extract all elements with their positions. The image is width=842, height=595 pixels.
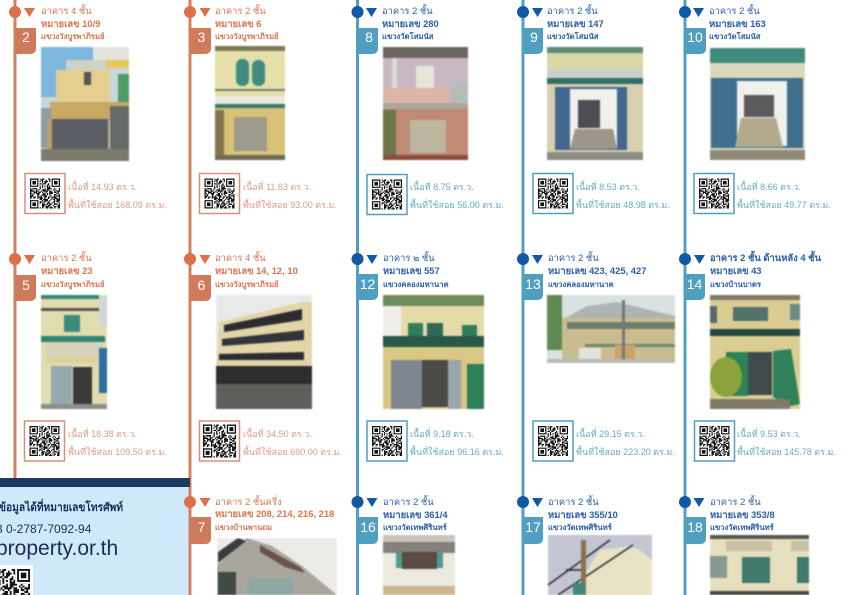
area details (68, 180, 167, 210)
heading: แขวงวัดโสมนัส (547, 31, 599, 41)
number tab (190, 517, 211, 544)
area details (243, 180, 337, 210)
number tab (15, 28, 36, 54)
heading (383, 251, 449, 289)
number tab: 14 (687, 276, 702, 292)
heading: แขวงวัดเทพศิรินทร์ (548, 523, 613, 532)
heading: แขวงบ้านพานถม (215, 523, 272, 532)
marker (352, 6, 377, 18)
heading (383, 495, 448, 532)
area details: เนื้อที่ 8.75 ตร.ว. (410, 180, 474, 192)
heading (548, 251, 646, 289)
marker (517, 496, 543, 508)
card 12 (352, 251, 504, 461)
photo (383, 47, 468, 160)
area details (410, 427, 504, 457)
heading (41, 4, 105, 42)
heading (215, 4, 279, 42)
area details: เนื้อที่ 34.50 ตร.ว. (243, 427, 312, 439)
area details: พื้นที่ใช้สอย 109.50 ตร.ม. (68, 445, 167, 457)
marker (517, 253, 543, 265)
area details: พื้นที่ใช้สอย 223.20 ตร.ม. (576, 445, 675, 457)
heading: แขวงวัดเทพศิรินทร์ (710, 523, 775, 532)
area details: พื้นที่ใช้สอย 48.98 ตร.ม. (576, 198, 670, 210)
timeline: blue column 4 (522, 0, 524, 595)
heading: อาคาร 2 ชั้นครึ่ง (215, 495, 282, 507)
heading: หมายเลข 353/8 (710, 509, 775, 520)
photo (710, 295, 800, 409)
QR code (367, 174, 407, 214)
card 3 (184, 4, 337, 214)
heading: หมายเลข 10/9 (41, 18, 100, 29)
card 8 (352, 4, 504, 214)
heading: อาคาร 2 ชั้น (548, 495, 599, 507)
panel header band (0, 478, 190, 487)
number tab (357, 274, 378, 300)
marker (9, 253, 35, 265)
number tab (523, 274, 543, 300)
heading: หมายเลข 6 (215, 18, 261, 29)
heading (41, 251, 105, 290)
heading: อาคาร 2 ชั้น (547, 4, 598, 16)
heading (382, 4, 439, 41)
heading: แขวงวังบูรพาภิรมย์ (41, 32, 105, 42)
heading: แขวงคลองมหานาค (548, 280, 614, 289)
marker (352, 253, 378, 265)
marker (9, 6, 35, 18)
number tab: 12 (360, 276, 375, 292)
photo (548, 535, 652, 595)
area details (576, 427, 675, 457)
heading (215, 495, 334, 532)
heading: หมายเลข 23 (41, 265, 93, 276)
photo (216, 295, 312, 409)
number tab: 2 (22, 29, 30, 45)
heading: แขวงวังบูรพาภิรมย์ (215, 280, 279, 290)
heading: อาคาร 2 ชั้น ด้านหลัง 4 ชั้น (710, 250, 822, 263)
number tab (357, 28, 378, 54)
card 5 (9, 251, 167, 461)
photo (41, 295, 107, 409)
timeline: blue column 5 (684, 0, 686, 595)
number tab: 9 (530, 29, 538, 45)
number tab: 3 (198, 29, 206, 45)
heading: แขวงวังบูรพาภิรมย์ (41, 280, 105, 290)
heading: อาคาร 4 ชั้น (215, 251, 266, 263)
number tab: 18 (687, 519, 703, 535)
photo (383, 295, 484, 409)
heading: แขวงวัดโสมนัส (709, 31, 761, 41)
area details (410, 180, 504, 210)
QR code (533, 421, 573, 461)
heading: อาคาร 2 ชั้น (710, 495, 761, 507)
number tab: 16 (360, 519, 376, 535)
photo (215, 46, 285, 160)
heading: อาคาร 2 ชั้น (215, 4, 266, 16)
heading: อาคาร ๒ ชั้น (383, 251, 435, 263)
heading (709, 4, 766, 41)
area details: เนื้อที่ 8.66 ตร.ว. (737, 180, 801, 192)
area details: เนื้อที่ 11.63 ตร.ว. (243, 180, 311, 192)
marker (517, 6, 543, 18)
contact heading: ข้อมูลได้ที่หมายเลขโทรศัพท์ (0, 498, 123, 515)
marker (184, 253, 210, 265)
card 10 (679, 4, 831, 214)
photo (547, 295, 675, 363)
marker (184, 496, 210, 508)
heading: หมายเลข 147 (547, 18, 604, 29)
area details: พื้นที่ใช้สอย 168.09 ตร.ม. (68, 198, 167, 210)
card 2 (9, 4, 167, 214)
number tab: 6 (198, 277, 206, 293)
number tab: 10 (687, 29, 703, 45)
area details: เนื้อที่ 14.93 ตร.ว. (68, 180, 137, 192)
number tab (685, 28, 706, 54)
number tab: 7 (198, 519, 206, 535)
photo (547, 47, 643, 160)
card 7 (184, 495, 337, 595)
QR code (200, 421, 240, 461)
heading: หมายเลข 163 (709, 18, 766, 29)
photo (41, 47, 129, 161)
timeline: orange column 1 (14, 0, 16, 478)
heading: แขวงวัดโสมนัส (382, 31, 434, 41)
number tab (685, 274, 705, 300)
area details (737, 427, 836, 457)
marker (679, 496, 704, 508)
contact panel (0, 478, 190, 595)
marker (352, 496, 378, 508)
photo (217, 538, 337, 595)
heading: อาคาร 2 ชั้น (382, 4, 433, 16)
photo (710, 535, 809, 595)
heading: แขวงบ้านบาตร (710, 280, 762, 289)
timeline: orange column 2 (188, 0, 192, 595)
heading: หมายเลข 14, 12, 10 (215, 265, 298, 276)
number tab: 17 (525, 519, 541, 535)
panel background (0, 478, 188, 595)
marker (679, 253, 705, 265)
area details (68, 427, 167, 457)
photo (383, 535, 455, 595)
heading (547, 4, 604, 41)
heading (710, 495, 775, 532)
QR code (200, 174, 240, 214)
marker (679, 6, 704, 18)
card 9 (517, 4, 670, 214)
heading (215, 251, 298, 290)
QR code (24, 421, 64, 461)
card 13 (517, 251, 675, 461)
heading: หมายเลข 280 (382, 18, 439, 29)
number tab (190, 275, 211, 301)
heading: อาคาร 2 ชั้น (383, 495, 434, 507)
area details: พื้นที่ใช้สอย 56.00 ตร.ม. (410, 198, 504, 210)
heading: อาคาร 2 ชั้น (548, 251, 599, 263)
number tab: 13 (525, 276, 541, 292)
heading: หมายเลข 557 (383, 265, 440, 276)
area details: พื้นที่ใช้สอย 49.77 ตร.ม. (737, 198, 831, 210)
card 17 (517, 495, 652, 595)
heading: หมายเลข 423, 425, 427 (548, 265, 646, 276)
area details (737, 180, 831, 210)
heading: หมายเลข 43 (710, 265, 762, 276)
area details: เนื้อที่ 9.53 ตร.ว. (737, 427, 801, 439)
area details: พื้นที่ใช้สอย 145.78 ตร.ม. (737, 445, 836, 457)
number tab (15, 275, 36, 301)
photo (710, 48, 805, 160)
QR code (367, 421, 407, 461)
heading: หมายเลข 208, 214, 216, 218 (215, 508, 334, 519)
heading (710, 250, 822, 289)
heading: แขวงวัดเทพศิรินทร์ (383, 523, 448, 532)
card 16 (352, 495, 455, 595)
area details: พื้นที่ใช้สอย 690.00 ตร.ม. (243, 445, 342, 457)
number tab: 8 (365, 29, 373, 45)
number tab (190, 28, 211, 54)
area details: เนื้อที่ 8.53 ตร.ว. (576, 180, 640, 192)
card 6 (184, 251, 342, 461)
number tab: 5 (22, 277, 30, 293)
area details (243, 427, 342, 457)
QR code (25, 174, 65, 214)
area details: เนื้อที่ 18.38 ตร.ว. (68, 427, 137, 439)
heading: อาคาร 4 ชั้น (41, 4, 92, 16)
area details: พื้นที่ใช้สอย 96.16 ตร.ม. (410, 445, 504, 457)
QR code (694, 421, 734, 461)
heading (548, 495, 618, 532)
number tab (523, 28, 543, 54)
area details (576, 180, 670, 210)
QR code (533, 174, 573, 214)
heading: แขวงวังบูรพาภิรมย์ (215, 32, 279, 42)
timeline: blue column 3 (356, 0, 359, 595)
heading: อาคาร 2 ชั้น (709, 4, 760, 16)
marker (184, 6, 210, 18)
heading: อาคาร 2 ชั้น (41, 251, 92, 263)
area details: พื้นที่ใช้สอย 93.00 ตร.ม. (243, 198, 337, 210)
card 14 (679, 250, 836, 461)
QR code (694, 174, 734, 214)
heading: หมายเลข 355/10 (548, 509, 618, 520)
card 18 (679, 495, 809, 595)
heading: แขวงคลองมหานาค (383, 280, 449, 289)
area details: เนื้อที่ 29.15 ตร.ว. (576, 427, 645, 439)
area details: เนื้อที่ 9.18 ตร.ว. (410, 427, 474, 439)
QR code (0, 565, 33, 595)
heading: หมายเลข 361/4 (383, 509, 448, 520)
